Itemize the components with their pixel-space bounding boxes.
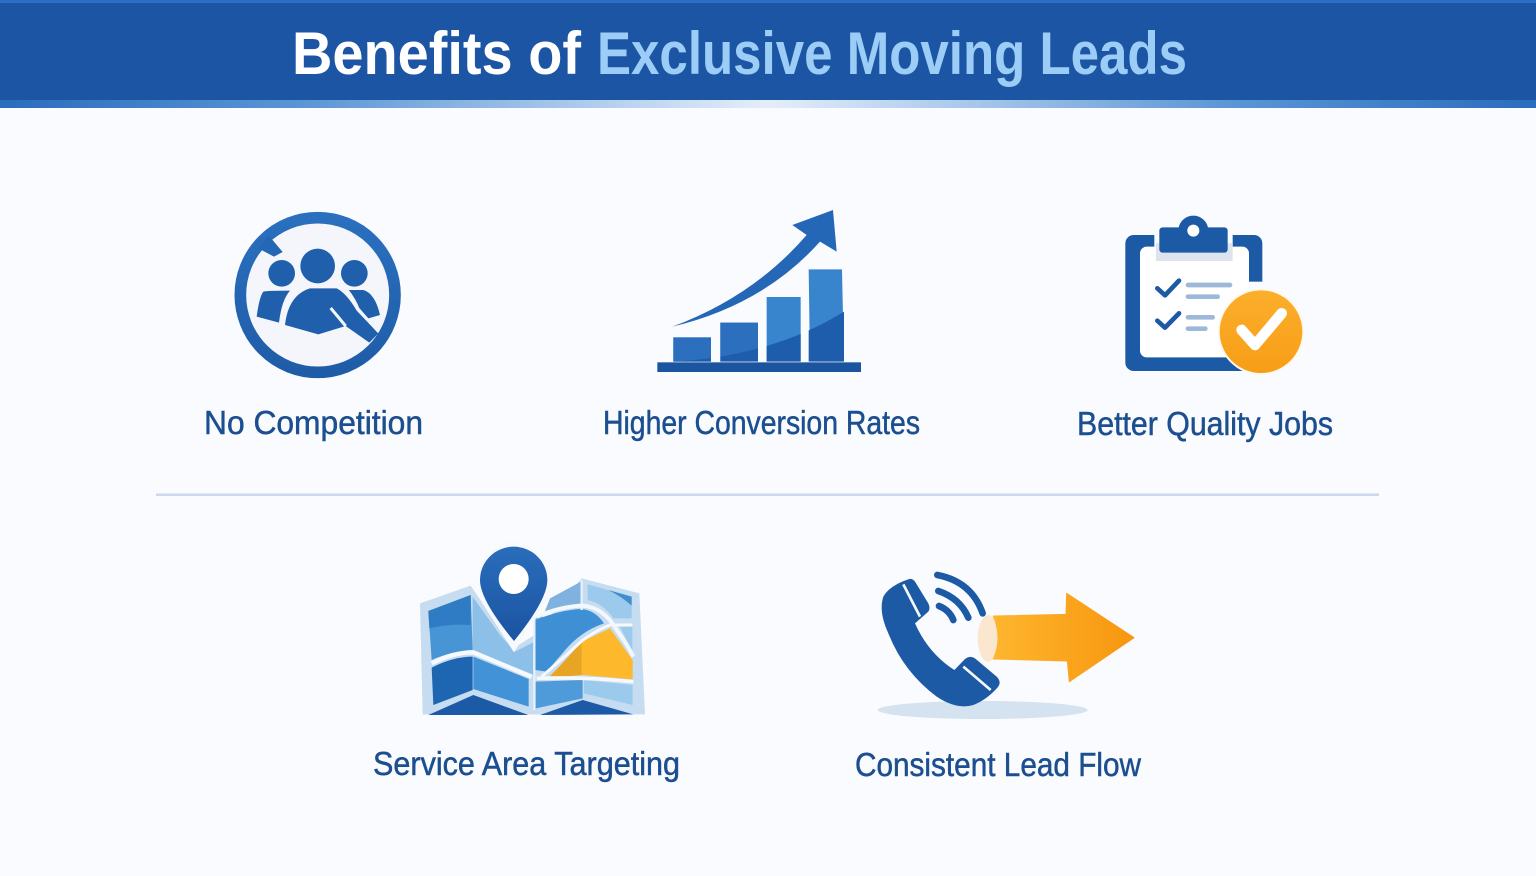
label: Better Quality Jobs bbox=[1077, 405, 1333, 442]
icon: phone with arrow bbox=[878, 575, 1134, 719]
title: Exclusive Moving Leads bbox=[597, 20, 1187, 87]
panel: no competition bbox=[204, 218, 423, 441]
icon: crowd prohibited bbox=[240, 218, 395, 372]
icon: growth bar chart bbox=[657, 210, 861, 372]
label: Service Area Targeting bbox=[373, 745, 680, 782]
divider bbox=[156, 494, 1379, 496]
title: Benefits of bbox=[292, 20, 582, 87]
panel: service area targeting bbox=[373, 542, 680, 782]
panel: higher conversion rates bbox=[603, 210, 920, 441]
icon: folded map with pin bbox=[420, 542, 645, 715]
label: No Competition bbox=[204, 404, 423, 441]
label: Consistent Lead Flow bbox=[855, 746, 1141, 783]
header banner bbox=[0, 0, 1536, 108]
label: Higher Conversion Rates bbox=[603, 404, 920, 441]
title bbox=[292, 20, 1187, 87]
icon: clipboard with checkmark bbox=[1125, 216, 1304, 375]
panel: consistent lead flow bbox=[855, 575, 1141, 783]
panel: better quality jobs bbox=[1077, 216, 1333, 442]
